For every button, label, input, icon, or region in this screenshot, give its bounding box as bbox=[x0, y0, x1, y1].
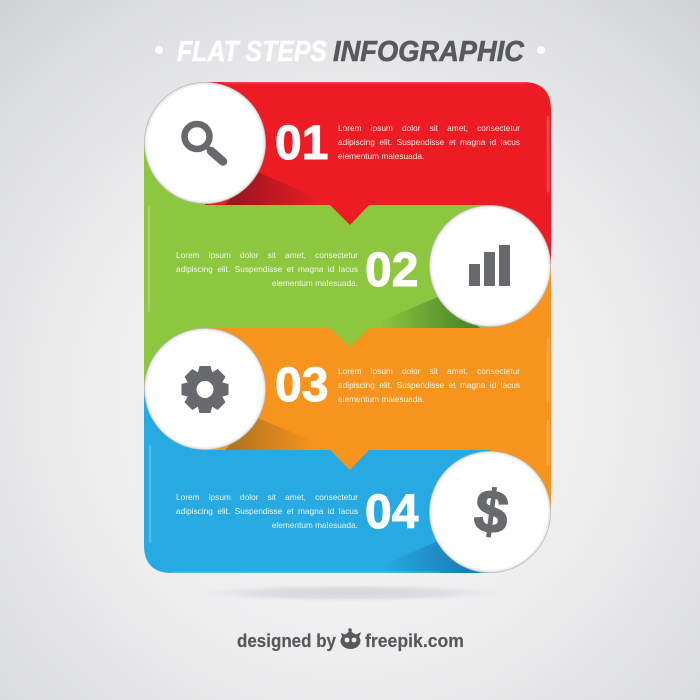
icon: bar chart bbox=[469, 245, 510, 286]
text block 1 bbox=[338, 123, 520, 161]
fold shadow: green bbox=[365, 296, 480, 328]
edge highlights bbox=[149, 82, 548, 572]
title dot right bbox=[537, 46, 545, 54]
footer credit bbox=[237, 631, 464, 651]
icon: freepik logo bbox=[340, 628, 361, 649]
title bbox=[177, 36, 524, 68]
text block 2: elementum malesuada. bbox=[272, 278, 358, 288]
text block 1: elementum malesuada. bbox=[338, 151, 424, 161]
text block 2 bbox=[176, 250, 358, 288]
text block 1: Lorem ipsum dolor sit amet, consectetur bbox=[338, 123, 520, 133]
footer credit: designed by bbox=[237, 631, 336, 651]
circle 3 bbox=[144, 328, 266, 450]
icon: gear bbox=[182, 366, 228, 413]
circle 2 bbox=[429, 205, 551, 327]
band 4: blue bbox=[144, 389, 490, 573]
text block 4: elementum malesuada. bbox=[272, 520, 358, 530]
text block 2: adipiscing elit. Suspendisse et magna id lacus bbox=[176, 264, 358, 274]
number 01: 01 bbox=[275, 117, 328, 170]
text block 3: elementum malesuada. bbox=[338, 394, 424, 404]
fold shadow: red bbox=[225, 171, 335, 205]
icon: dollar sign: $ bbox=[471, 476, 512, 547]
title: INFOGRAPHIC bbox=[333, 36, 524, 68]
fold shadow: blue bbox=[365, 540, 480, 573]
circle 4 bbox=[429, 451, 551, 573]
text block 4 bbox=[176, 492, 358, 530]
text block 4: adipiscing elit. Suspendisse et magna id lacus bbox=[176, 506, 358, 516]
text block 2: Lorem ipsum dolor sit amet, consectetur bbox=[176, 250, 358, 260]
number 03: 03 bbox=[275, 359, 328, 412]
title: FLAT STEPS bbox=[177, 36, 327, 68]
circle 1 bbox=[144, 82, 266, 204]
text block 3 bbox=[338, 366, 520, 404]
title dot left bbox=[155, 46, 163, 54]
text block 3: adipiscing elit. Suspendisse et magna id lacus bbox=[338, 380, 520, 390]
text block 4: Lorem ipsum dolor sit amet, consectetur bbox=[176, 492, 358, 502]
icon: magnifier bbox=[184, 124, 223, 162]
number 04: 04 bbox=[365, 486, 418, 539]
band 1: red bbox=[205, 82, 551, 266]
card ground shadow bbox=[190, 584, 510, 602]
footer credit: freepik.com bbox=[365, 631, 464, 651]
band 3: orange bbox=[205, 266, 551, 512]
band 2: green bbox=[144, 143, 490, 389]
text block 3: Lorem ipsum dolor sit amet, consectetur bbox=[338, 366, 520, 376]
text block 1: adipiscing elit. Suspendisse et magna id lacus bbox=[338, 137, 520, 147]
fold shadow: orange bbox=[225, 417, 335, 450]
number 02: 02 bbox=[365, 244, 418, 297]
